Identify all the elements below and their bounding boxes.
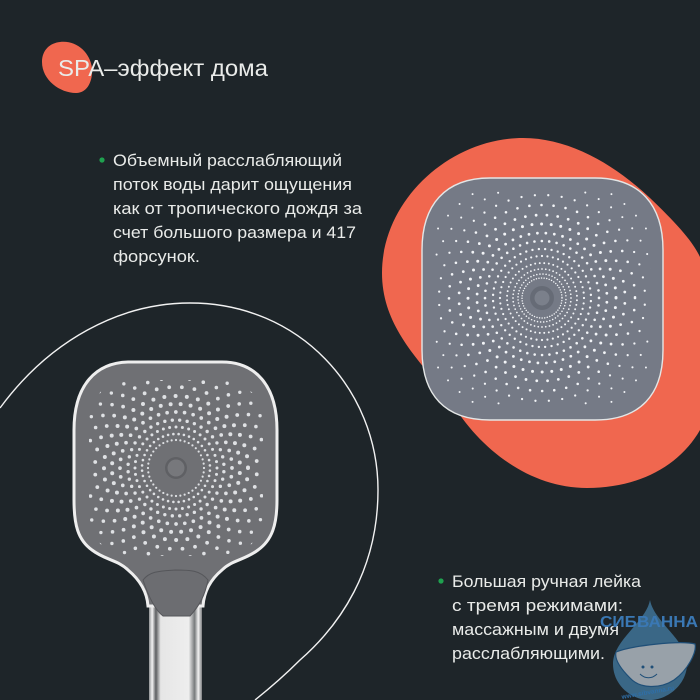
description lines xyxy=(452,572,642,663)
center medallion xyxy=(165,457,187,479)
rain shower head xyxy=(421,177,664,421)
head body xyxy=(74,362,277,606)
title accent blob xyxy=(42,42,92,93)
center medallion xyxy=(530,286,554,310)
description lines: форсунок. xyxy=(113,247,200,266)
bathtub face xyxy=(640,666,657,678)
coral blob behind rain shower head xyxy=(382,138,700,488)
hand shower xyxy=(68,360,284,700)
bathtub xyxy=(616,643,695,687)
nozzle rings xyxy=(436,192,648,404)
description lines: Объемный расслабляющий xyxy=(113,151,342,170)
description lines: массажным и двумя xyxy=(452,620,619,639)
bullet xyxy=(438,578,444,584)
description lines: Большая ручная лейка xyxy=(452,572,642,591)
description lines: счет большого размера и 417 xyxy=(113,223,356,242)
description lines: как от тропического дождя за xyxy=(113,199,363,218)
text block: hand shower description xyxy=(438,572,642,663)
description lines: с тремя режимами: xyxy=(452,596,623,615)
thin white outline blob xyxy=(0,303,378,700)
watermark logo xyxy=(600,600,698,700)
text block: rain shower description xyxy=(99,151,363,266)
head body xyxy=(422,178,663,420)
description lines xyxy=(113,151,363,266)
nozzle rings xyxy=(89,380,263,556)
description lines: поток воды дарит ощущения xyxy=(113,175,352,194)
bullet xyxy=(99,157,105,163)
handle xyxy=(149,600,202,700)
mode button xyxy=(143,570,208,616)
description lines: расслабляющими. xyxy=(452,644,605,663)
title: SPA–эффект дома xyxy=(58,55,269,81)
brand name: СИБВАННА xyxy=(600,614,698,631)
water drop xyxy=(613,600,687,700)
